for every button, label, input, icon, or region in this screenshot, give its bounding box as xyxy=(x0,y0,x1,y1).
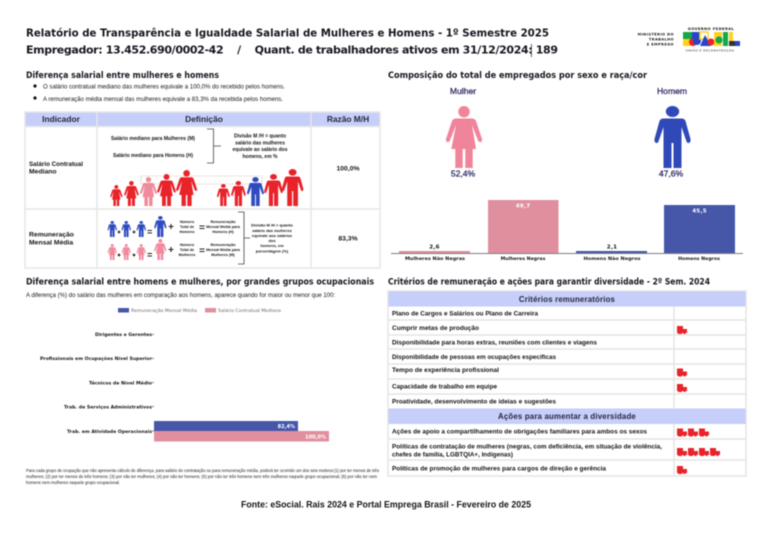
logo: governo federal: TRABALHO xyxy=(649,38,674,42)
definition note xyxy=(251,222,293,254)
bar chart: composition: Mulheres Não Negras xyxy=(405,256,465,262)
man share xyxy=(654,86,691,178)
woman share: 52,4% xyxy=(451,168,476,178)
label: remuneração média: Mulheres (M) xyxy=(211,253,235,257)
bar chart: composition: 2,6 xyxy=(429,244,440,250)
definition note: salário das mulheres xyxy=(235,140,285,146)
definition note: salário das mulheres xyxy=(252,228,293,233)
value: 83,3%: 83,3% xyxy=(338,236,358,242)
legend xyxy=(118,308,281,313)
bar chart: composition: Mulheres Negras xyxy=(501,256,546,262)
criteria rows xyxy=(392,310,597,406)
icons: men sum xyxy=(108,216,166,237)
legend: Remuneração Mensal Média xyxy=(131,308,197,313)
label: número total: Total de xyxy=(180,248,194,252)
action rows: Políticas de promoção de mulheres para cargos de direção e gerência xyxy=(392,466,606,472)
subtitle: A diferença (%) do salário das mulheres em comparação aos homens, aparece quando for maior ou menor que 100: xyxy=(26,292,335,299)
definition note: homens, em % xyxy=(242,154,278,160)
legend: Salário Contratual Mediano xyxy=(218,308,281,313)
woman share: Mulher xyxy=(450,86,476,96)
table header: Indicador xyxy=(42,114,81,124)
bar chart: composition: 49,7 xyxy=(516,204,530,210)
action rows: Ações de apoio a compartilhamento de obrigações familiares para ambos os sexos xyxy=(392,428,647,436)
bullet list: O salário contratual mediano das mulheres equivale a 100,0% do recebido pelos homens. xyxy=(43,84,285,90)
bracket xyxy=(238,212,250,264)
row: salário contratual mediano: Salário mediano para Homens (H) xyxy=(113,153,193,159)
title: Empregador: 13.452.690/0002-42 / Quant. de trabalhadores ativos em 31/12/2024: 189 xyxy=(26,44,558,56)
label: remuneração média: Homens (H) xyxy=(212,230,234,234)
man share: 47,6% xyxy=(659,168,684,178)
row: salário contratual mediano xyxy=(29,129,360,206)
definition note: porcentagem (%) xyxy=(256,248,289,254)
woman share xyxy=(446,86,482,178)
label: número total: Homens xyxy=(180,230,194,234)
label: remuneração média: Remuneração xyxy=(210,220,236,224)
footnote: Para cada grupo de ocupação que não apresenta cálculo de diferença, para salário de contratação ou para remuneração média, poderá ter ocorrido um dos seis motivos:(1) por ter menos de três xyxy=(26,468,380,473)
criteria rows: Disponibilidade de pessoas em ocupações específicas xyxy=(392,354,556,361)
action rows: chefes de família, LGBTQIA+, Indígenas) xyxy=(392,452,513,458)
criteria rows: Plano de Cargos e Salários ou Plano de Carreira xyxy=(392,310,538,318)
bar chart: occupational groups: 82,4% xyxy=(278,424,295,430)
bar chart: composition: Homens Negros xyxy=(678,256,720,262)
criteria rows: Capacidade de trabalho em equipe xyxy=(392,384,497,390)
icons: men scale xyxy=(217,169,303,206)
icons: women sum xyxy=(108,239,166,260)
heading: diferença salarial: Diferença salarial entre mulheres e homens xyxy=(26,71,219,81)
dashed highlight xyxy=(141,176,262,184)
bar chart: composition: 45,5 xyxy=(692,208,707,214)
definition note xyxy=(232,134,288,160)
definition note: Divisão M /H = quanto xyxy=(234,134,286,140)
heading: grupos ocupacionais: Diferença salarial entre homens e mulheres, por grandes grupos ocupacionais xyxy=(26,278,374,288)
label: número total: Mulheres xyxy=(179,253,195,257)
operators xyxy=(118,224,204,256)
bar chart: occupational groups: Técnicos de Nível Médio xyxy=(89,380,152,386)
bracket xyxy=(207,129,221,163)
definition note: Divisão M /H = quanto xyxy=(251,222,293,228)
logo: governo federal: UNIÃO E RECONSTRUÇÃO xyxy=(686,48,735,52)
row: remuneração mensal média: Remuneração xyxy=(29,232,74,238)
heading: composição: Composição do total de empregados por sexo e raça/cor xyxy=(388,71,648,81)
title: Relatório de Transparência e Igualdade Salarial de Mulheres e Homens - 1º Semestre 2025 xyxy=(26,26,549,40)
criteria rows: Cumprir metas de produção xyxy=(392,325,479,332)
bar chart: occupational groups: Dirigentes e Gerentes xyxy=(95,332,152,338)
title xyxy=(26,26,558,57)
panel: criteria table xyxy=(388,291,746,476)
bar chart: occupational groups: Trab. em Atividade Operacionais xyxy=(67,429,152,435)
table header: Razão M/H xyxy=(327,114,369,124)
heading: critérios: Critérios de remuneração e ações para garantir diversidade - 2º Sem. 2024 xyxy=(388,276,710,288)
source: Fonte: eSocial. Rais 2024 e Portal Emprega Brasil - Fevereiro de 2025 xyxy=(241,500,531,510)
label: remuneração média: Mensal Média para xyxy=(206,225,241,229)
action rows xyxy=(392,428,662,472)
table header: Definição xyxy=(185,114,223,124)
bullet list: A remuneração média mensal das mulheres equivale a 83,3% da recebida pelos homens. xyxy=(43,96,283,103)
logo: governo federal: GOVERNO FEDERAL xyxy=(688,27,734,31)
label: número total: Número xyxy=(180,220,195,224)
icons: action marks xyxy=(677,428,720,474)
label: remuneração média xyxy=(206,220,241,257)
panel: indicator table xyxy=(25,112,380,268)
label: remuneração média: Mensal Média para xyxy=(206,248,241,252)
definition note: equivale aos salários xyxy=(252,233,293,238)
bar chart: occupational groups: 100,0% xyxy=(305,434,326,440)
bar chart: composition: 2,1 xyxy=(607,244,617,250)
bar chart: occupational groups: Profissionais em Ocupações Nível Superior xyxy=(40,355,153,362)
table header xyxy=(26,113,379,126)
criteria rows: Proatividade, desenvolvimento de ideias e sugestões xyxy=(392,398,556,406)
row: salário contratual mediano: Salário Contratual xyxy=(29,161,83,168)
bullet list xyxy=(33,84,285,103)
chart: composition icons xyxy=(446,86,691,178)
definition note: equivale ao salário dos xyxy=(232,147,288,153)
logo: governo federal: E EMPREGO xyxy=(647,42,674,46)
action rows: Políticas de contratação de mulheres (negras, com deficiência, em situação de violência, xyxy=(392,444,662,450)
icons: criteria marks xyxy=(677,326,687,392)
man share: Homem xyxy=(657,86,687,96)
row: salário contratual mediano: Salário mediano para Mulheres (M) xyxy=(111,136,195,142)
icons: women scale xyxy=(110,170,197,206)
criteria rows: Tempo de experiência profissional xyxy=(392,367,499,374)
section header: ações xyxy=(388,408,746,424)
label: remuneração média: Remuneração xyxy=(210,243,236,247)
bar chart: composition: Homens Não Negros xyxy=(584,256,641,262)
logo: governo federal xyxy=(638,27,740,52)
label: número total xyxy=(179,220,195,257)
row: salário contratual mediano: Mediano xyxy=(29,168,57,176)
label: número total: Número xyxy=(180,243,195,247)
footnote: mulheres; (2) por ter menos de três homens; (3) por não ter mulheres; (4) por não ter homens; (5) por não ter três homens nem três mulheres naquele grupo ocupacional; (6) por não ter nem xyxy=(26,474,377,479)
footnote xyxy=(26,468,380,485)
section header: critérios remuneratórios xyxy=(388,292,746,306)
value: 100,0%: 100,0% xyxy=(336,166,360,172)
footnote: homens nem mulheres naquele grupo ocupacional. xyxy=(26,480,120,485)
logo: governo federal: MINISTÉRIO DO xyxy=(638,32,674,36)
row: remuneração mensal média xyxy=(29,212,358,264)
section header: critérios remuneratórios: Critérios remuneratórios xyxy=(519,295,616,304)
bar chart: occupational groups: Trab. de Serviços Administrativos xyxy=(64,404,152,410)
definition note: homens, em xyxy=(260,243,284,248)
label: número total: Total de xyxy=(180,225,194,229)
section header: ações: Ações para aumentar a diversidade xyxy=(498,412,636,421)
bar chart: composition xyxy=(391,200,743,262)
row: remuneração mensal média: Mensal Média xyxy=(29,240,73,246)
bar chart: occupational groups xyxy=(40,332,329,442)
definition note: dos xyxy=(268,238,276,243)
criteria rows: Disponibilidade para horas extras, reuniões com clientes e viagens xyxy=(392,340,597,346)
